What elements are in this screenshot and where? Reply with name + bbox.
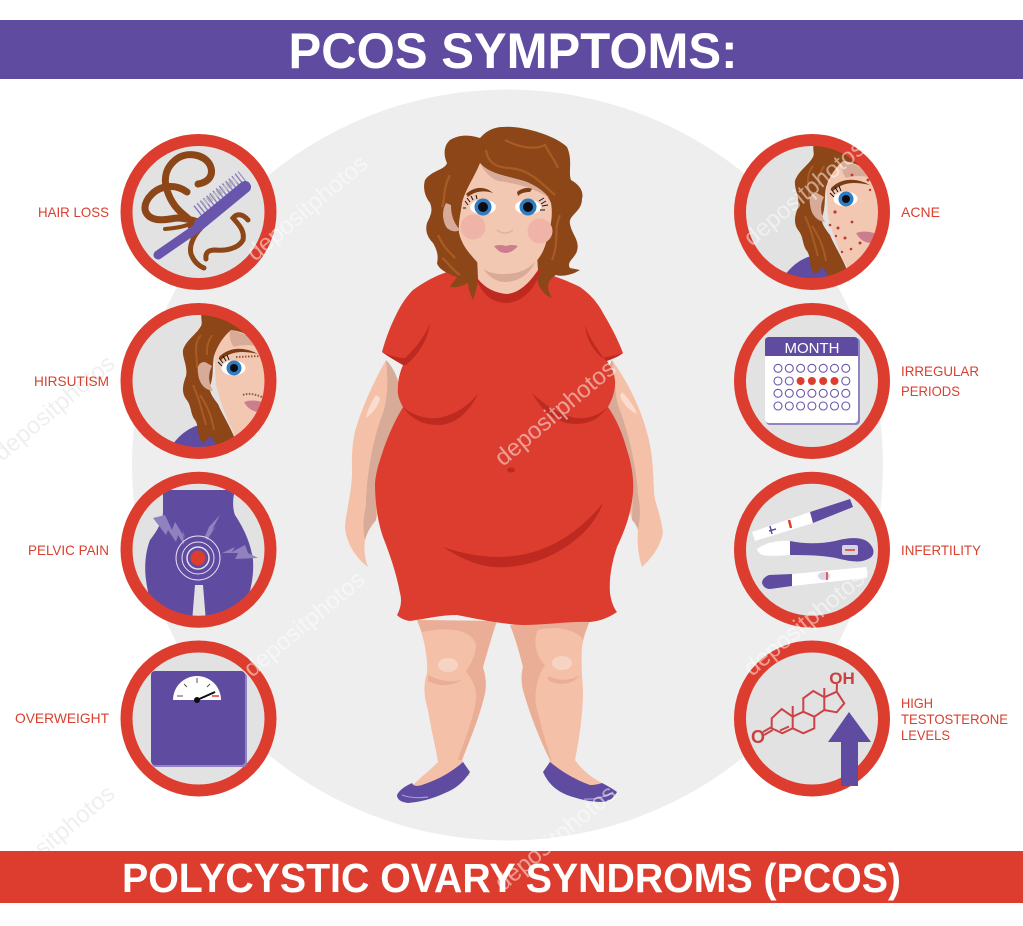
watermark text: depositphotos <box>739 565 870 682</box>
cheeks <box>460 214 486 240</box>
symptom: irregular periods <box>740 309 979 453</box>
label: pelvic pain: PELVIC PAIN <box>28 542 109 558</box>
symptom: pelvic pain <box>28 478 270 622</box>
label: infertility: INFERTILITY <box>901 542 982 558</box>
title banner: PCOS SYMPTOMS: <box>288 23 738 79</box>
face <box>459 163 552 274</box>
label: overweight: OVERWEIGHT <box>15 710 109 726</box>
icon: pregnancy tests <box>740 478 884 622</box>
icon: hair strands and brush <box>126 140 270 284</box>
icon: woman with facial hair <box>126 309 290 455</box>
forehead shadow <box>480 163 549 198</box>
collar <box>476 270 541 303</box>
icon: pelvis with pain target <box>126 478 270 622</box>
left arm <box>345 360 405 567</box>
watermark text: depositphotos <box>239 566 370 683</box>
watermark text: depositphotos <box>739 135 870 252</box>
watermark text <box>239 135 870 897</box>
label: acne: ACNE <box>901 204 940 220</box>
symptom: hirsutism <box>34 309 290 455</box>
watermark text: depositphotos <box>242 150 373 267</box>
ear <box>443 203 460 231</box>
label: hair loss: HAIR LOSS <box>38 204 109 220</box>
footer banner: POLYCYSTIC OVARY SYNDROMS (PCOS) <box>122 855 901 901</box>
label: high testosterone levels: HIGH <box>901 695 933 711</box>
chin shadow <box>477 258 537 282</box>
symptom: infertility <box>740 478 982 622</box>
icon: woman with acne <box>740 140 902 286</box>
label: hirsutism: HIRSUTISM <box>34 373 109 389</box>
symptom: hair loss <box>38 140 270 284</box>
icon: calendar <box>740 309 884 453</box>
neck <box>477 255 538 294</box>
label: irregular periods: IRREGULAR <box>901 363 979 379</box>
lips <box>494 245 518 253</box>
icon: testosterone molecule and arrow: O <box>751 727 765 747</box>
nose <box>497 230 513 233</box>
right shoe <box>543 762 617 802</box>
icon: testosterone molecule and arrow <box>740 646 884 790</box>
label: high testosterone levels: TESTOSTERONE <box>901 711 1008 727</box>
left leg <box>413 620 497 795</box>
large grey background circle <box>132 90 883 840</box>
icon: testosterone molecule and arrow: OH <box>829 669 855 688</box>
left shoe <box>397 762 470 803</box>
right arm <box>600 360 663 567</box>
watermark text on white margins <box>0 350 120 897</box>
central woman figure <box>345 127 663 803</box>
title banner <box>0 20 1023 79</box>
label: irregular periods: PERIODS <box>901 383 960 399</box>
eyebrows <box>466 188 493 197</box>
icon: bathroom scale <box>126 646 270 790</box>
watermark text: depositphotos <box>490 780 621 897</box>
symptom: acne <box>740 140 940 286</box>
symptom: high testosterone levels <box>740 646 1008 790</box>
eyes <box>470 200 496 214</box>
hair <box>424 127 583 300</box>
hair strands <box>438 140 560 275</box>
icon: calendar: MONTH <box>784 340 840 357</box>
head and face <box>424 127 583 303</box>
symptom: overweight <box>15 646 270 790</box>
right leg <box>510 620 602 795</box>
watermark text: depositphotos <box>490 355 621 472</box>
red dress <box>375 272 633 625</box>
label: high testosterone levels: LEVELS <box>901 727 950 743</box>
dress folds <box>382 323 623 567</box>
